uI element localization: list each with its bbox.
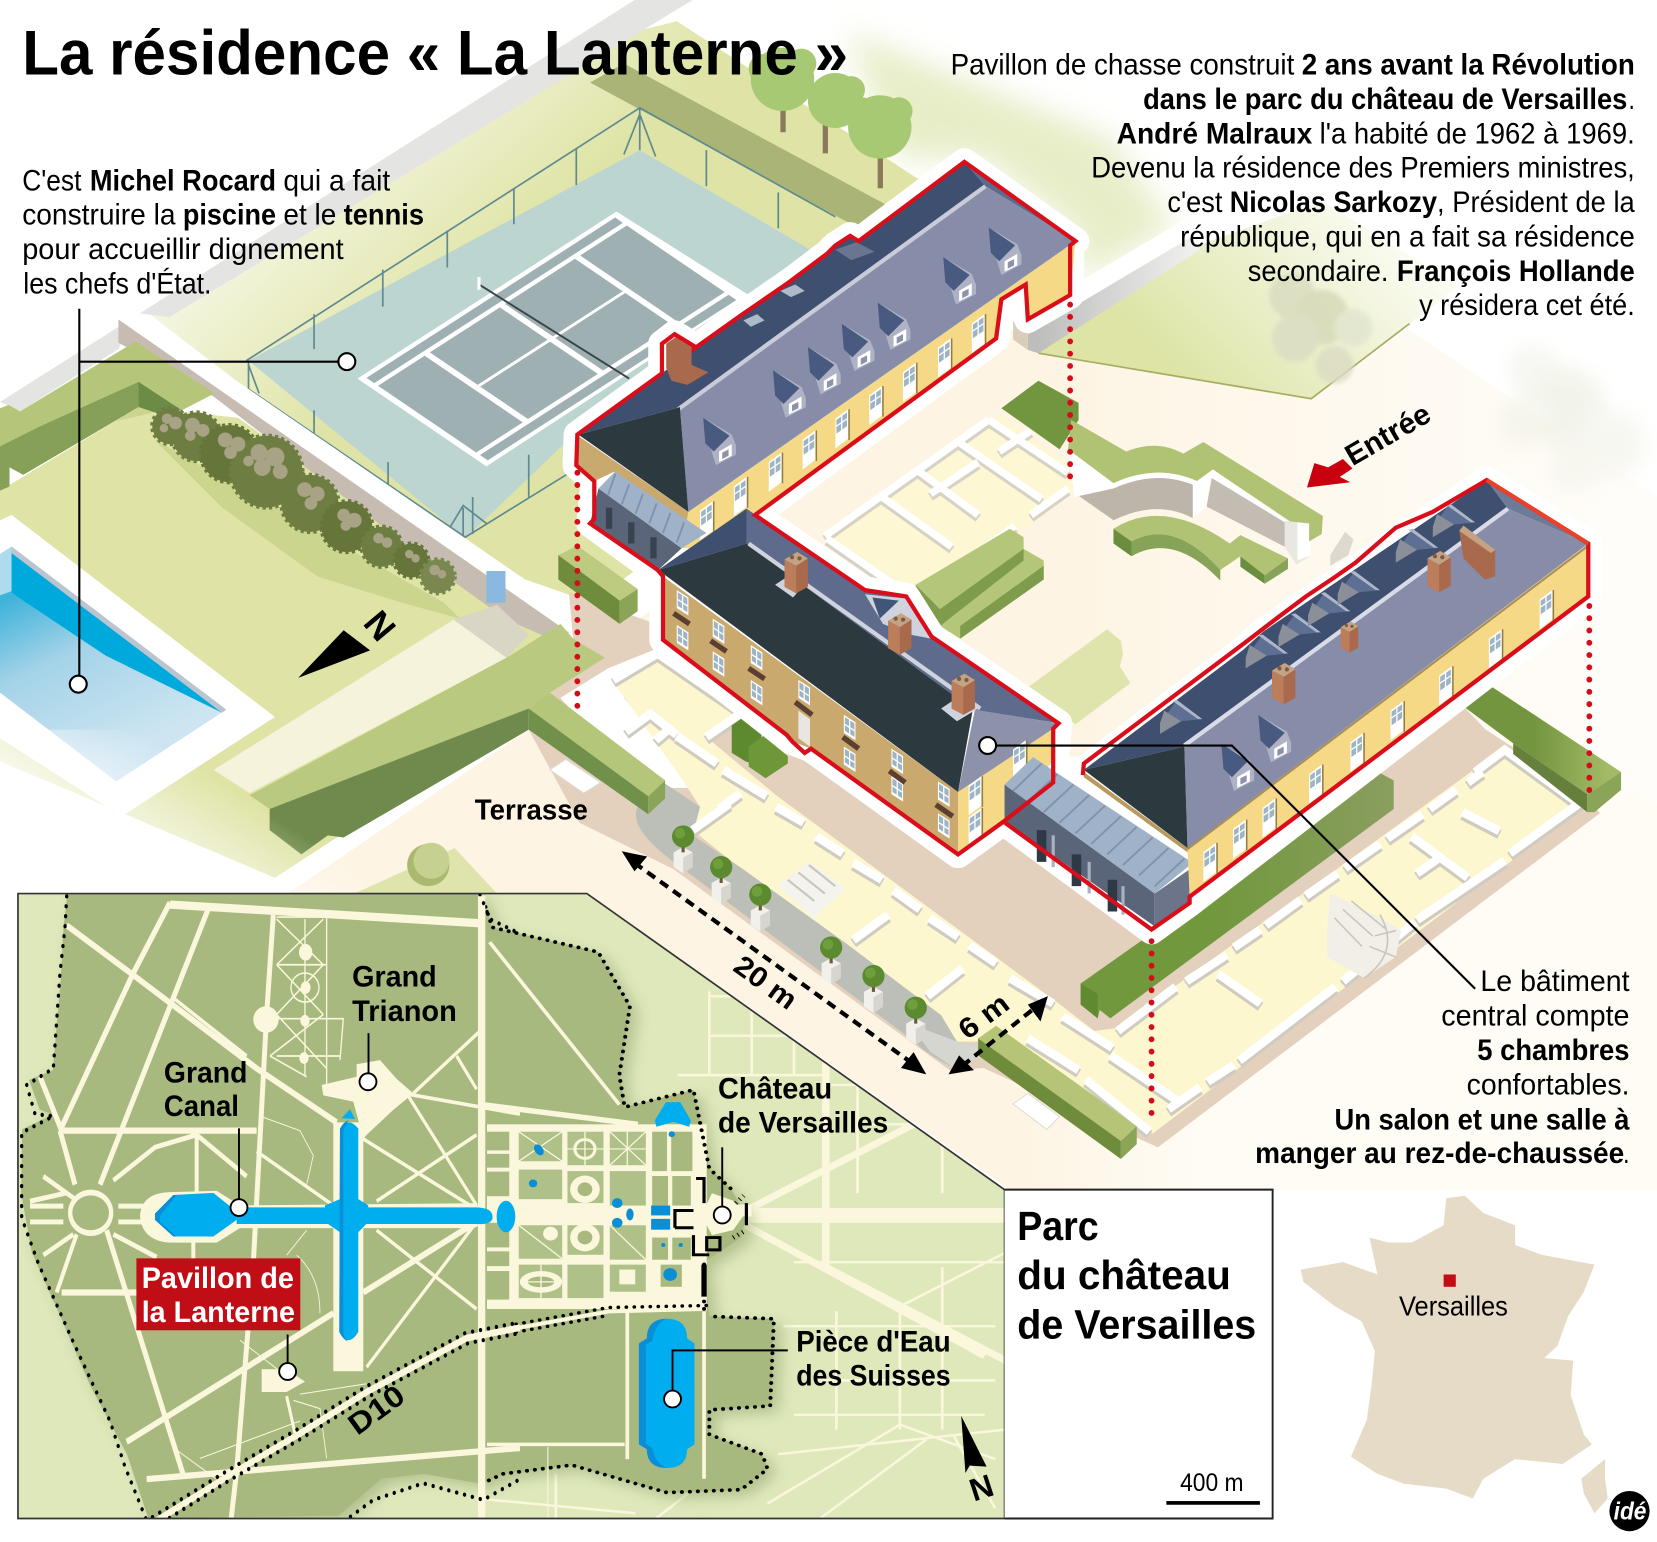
dimension 20 m [622, 851, 926, 1074]
swimming pool [0, 515, 275, 816]
map callouts [231, 1033, 788, 1407]
text block: left: Michel Rocard [90, 164, 276, 197]
hedge west [558, 546, 638, 601]
map labels: Trianon [352, 995, 457, 1028]
small basins [529, 1102, 691, 1281]
text block: right: François Hollande [1397, 255, 1635, 288]
text block: left: piscine [183, 199, 276, 232]
front dormers [1258, 715, 1291, 762]
text block: right: dans le parc du château de Versailles [1143, 83, 1627, 116]
star roundabout [68, 1190, 113, 1236]
hedges around building [529, 546, 1621, 1159]
upper right trees [749, 48, 913, 188]
north arrow map [961, 1416, 998, 1508]
text block: right: 2 ans avant la Révolution [1302, 49, 1635, 82]
map labels: D10 [342, 1379, 411, 1442]
lilac front slope [1184, 509, 1588, 848]
water: Grand Canal [155, 1109, 515, 1340]
navy back slope [578, 162, 986, 435]
chimney [666, 336, 708, 385]
entrance arrow: Entrée [1339, 397, 1437, 472]
text block: right: république, qui en a fait sa résidence [1180, 220, 1635, 253]
park area [21, 895, 774, 1518]
bush row [152, 408, 455, 593]
near-white ground south-east [1005, 788, 1657, 1190]
ground floor plan [550, 654, 1584, 1135]
dimension 6 m [949, 987, 1048, 1074]
label: Pavillon de la Lanterne: Pavillon de [142, 1262, 294, 1295]
text block: central building: manger au rez-de-chaussée [1255, 1137, 1624, 1170]
text block: central building: Le bâtiment [1480, 965, 1630, 998]
windows [700, 501, 714, 540]
dimension 20 m: 20 m [728, 949, 803, 1016]
lawn wedge upper right [1038, 201, 1459, 399]
text block: central building: 5 chambres [1477, 1034, 1630, 1067]
central building [658, 509, 1058, 854]
map labels: Canal [164, 1090, 239, 1123]
map labels: Grand [164, 1056, 247, 1089]
panel: title box: du château [1017, 1252, 1231, 1298]
back dormers [1160, 700, 1202, 734]
text block: left: tennis [344, 199, 424, 232]
white margin of plan [560, 648, 698, 796]
road wall top right [1028, 235, 1200, 353]
text block: right: secondaire. [1248, 255, 1388, 288]
central windows [677, 590, 688, 615]
callout: Grand Trianon [360, 1033, 376, 1090]
logo idé: idé [1614, 1498, 1646, 1526]
north arrow isometric: N [356, 603, 404, 649]
text block: right: c'est [1167, 186, 1222, 219]
château footprint [675, 1178, 746, 1297]
courtyard plan [825, 381, 1354, 724]
yellow wall [1187, 544, 1588, 897]
grey terrace path [636, 784, 980, 1067]
title: La résidence « La Lanterne » [22, 19, 848, 89]
map labels: Pièce d'Eau [796, 1325, 951, 1358]
park shadow [29, 901, 782, 1524]
lower lawn [0, 407, 608, 878]
chimneys [1272, 663, 1295, 704]
statue [1330, 532, 1354, 566]
entrance arrow [1307, 397, 1437, 488]
dark hip [1084, 747, 1187, 848]
scale bar: 400 m [1180, 1469, 1244, 1497]
yellow end wall [958, 729, 1053, 854]
white building halo [576, 162, 1588, 931]
dark front slope [658, 544, 973, 792]
lawn around tennis [148, 21, 1068, 603]
south annex [1005, 757, 1193, 926]
text block: central building: . [1623, 1137, 1630, 1170]
callout lines: pool and tennis [70, 309, 355, 693]
back hedge and green band [1001, 381, 1079, 449]
text block: left: construire la [22, 199, 176, 232]
lilac hip [958, 710, 1057, 792]
park boundary dotted east [482, 895, 774, 1493]
flat skylights [743, 314, 765, 327]
terrace label: Terrasse [475, 795, 588, 827]
scale bar [1166, 1469, 1260, 1505]
stairs [777, 862, 1401, 978]
north arrow map: N [965, 1467, 998, 1508]
curved wall [1074, 477, 1197, 520]
text block: central building: central compte [1441, 1000, 1630, 1033]
park boundary dotted west [22, 894, 520, 1527]
map outline [18, 894, 1005, 1519]
map labels: Château [718, 1073, 832, 1106]
navy hip top [658, 509, 747, 570]
France locator map [1301, 1196, 1608, 1513]
callout: Château [714, 1147, 731, 1223]
France locator map: Versailles [1399, 1290, 1508, 1321]
access road [0, 0, 693, 411]
hedge east [1463, 686, 1621, 794]
callout: Pièce d'Eau [664, 1350, 788, 1407]
text block: right: , Président de la [1437, 186, 1635, 219]
text block: central building: confortables. [1467, 1068, 1630, 1101]
canal surround [140, 1122, 500, 1371]
left wing building [577, 162, 1075, 550]
D10 road [145, 1322, 520, 1531]
floor plan walls [613, 654, 1579, 1135]
text block: right: André Malraux [1117, 117, 1313, 150]
tan gable wall [577, 437, 688, 548]
text block: left: qui a fait [283, 164, 390, 197]
map labels: de Versailles [718, 1107, 888, 1140]
main gardens [487, 1124, 707, 1309]
text block: left: et le [283, 199, 336, 232]
Trianon garden [270, 917, 343, 1089]
logo idé [1609, 1491, 1650, 1531]
lower hedges and fade [0, 605, 634, 909]
back dormer [865, 594, 932, 639]
callout: Pavillon de la Lanterne [279, 1335, 296, 1380]
text block: left [22, 164, 424, 300]
ground cream [264, 328, 1657, 1190]
courtyard rectangular hedges [916, 529, 1044, 639]
back slope [747, 509, 1058, 723]
Grand Trianon area [322, 1060, 413, 1139]
D10 road east [516, 1306, 707, 1332]
scene: ground and landscape [0, 0, 1657, 1190]
faded trees far right [1497, 345, 1646, 493]
windows [1203, 843, 1217, 882]
text block: left: pour accueillir dignement [22, 233, 344, 266]
planter trees [672, 825, 927, 1045]
panel: title box: de Versailles [1017, 1302, 1256, 1348]
hedge south-east [1081, 773, 1394, 1018]
label: Pavillon de la Lanterne: la Lanterne [142, 1296, 295, 1329]
red dotted verticals [577, 305, 1589, 1119]
left hedge [0, 342, 215, 491]
panel: title box [1005, 1190, 1273, 1519]
south-east wing [1084, 480, 1588, 897]
courtyard curved hedge [1113, 516, 1288, 575]
west annex [590, 472, 706, 570]
tennis court [246, 108, 835, 538]
east park roads [483, 942, 752, 1518]
map labels: Grand [352, 961, 437, 994]
town streets [476, 937, 1006, 1518]
tan terrace ground [529, 592, 1600, 1147]
text block: right: . [1628, 83, 1635, 116]
panel: title box: Parc [1017, 1203, 1099, 1249]
text block: right: Nicolas Sarkozy [1230, 186, 1438, 219]
boundary wall [118, 307, 571, 643]
Lanterne plot [262, 1369, 305, 1392]
navy back slope [1084, 480, 1508, 770]
yellow wall [682, 241, 1075, 550]
hedge terrace [529, 693, 665, 796]
north arrow isometric [298, 603, 404, 678]
map labels [164, 961, 951, 1442]
chimneys [775, 576, 807, 597]
text block: right: y résidera cet été. [1419, 289, 1635, 322]
map west part: park roads and canal [22, 894, 520, 1531]
boundary hedge top right [590, 63, 899, 233]
callout: Grand Canal [231, 1128, 247, 1216]
text block: right: Pavillon de chasse construit [951, 49, 1294, 82]
text block: right: l'a habité de 1962 à 1969. [1320, 117, 1635, 150]
panel: park map [18, 892, 1006, 1531]
faded background trees [1269, 273, 1373, 384]
callout line: central building [979, 737, 1475, 989]
water: Pièce d'Eau des Suisses [639, 1319, 695, 1468]
dimension 6 m: 6 m [953, 987, 1016, 1046]
cube bushes [732, 716, 761, 767]
map east part: town, park and gardens [21, 892, 1006, 1524]
courtyard lawn patch [1028, 629, 1130, 724]
hedge south-west [978, 1026, 1137, 1141]
front dormers [703, 418, 736, 465]
text block: left: les chefs d'État. [23, 267, 211, 300]
text block: central building: Un salon et une salle à [1334, 1103, 1630, 1136]
text block: central building [1255, 965, 1630, 1170]
bush row shadow [153, 439, 460, 619]
map labels: des Suisses [796, 1359, 951, 1392]
road white edge [0, 0, 634, 402]
tan facade [663, 576, 958, 854]
lilac front slope [680, 186, 1075, 512]
benches [550, 759, 1060, 1129]
text block: right [951, 49, 1635, 322]
text block: left: C'est [22, 164, 81, 197]
dark hip [578, 407, 688, 512]
red outlines [576, 162, 1588, 930]
label: Pavillon de la Lanterne [136, 1258, 300, 1330]
soft green fade behind right text [846, 32, 1174, 280]
